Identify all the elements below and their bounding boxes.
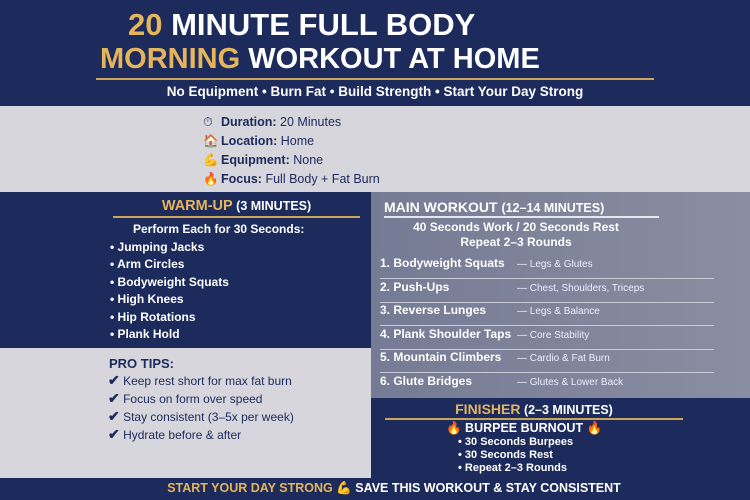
warm-up list	[110, 222, 304, 341]
exercise list	[380, 256, 714, 388]
main workout intro: 40 Seconds Work / 20 Seconds Rest	[413, 220, 619, 234]
info list: Focus: Full Body + Fat Burn	[221, 172, 380, 186]
tips list	[108, 372, 294, 442]
warm-up heading	[113, 198, 360, 218]
exercise list: 4. Plank Shoulder Taps	[380, 327, 511, 341]
info list: Equipment: None	[221, 153, 323, 167]
header	[0, 0, 750, 106]
info list: ⏱	[203, 115, 213, 129]
info list: 🏠	[203, 134, 219, 148]
exercise list: — Legs & Glutes	[517, 259, 593, 270]
warm-up list: • Hip Rotations	[110, 310, 196, 324]
footer	[0, 478, 750, 500]
info list: 🔥	[203, 172, 219, 186]
warm-up list: • Plank Hold	[110, 327, 180, 341]
warm-up list: • Jumping Jacks	[110, 240, 204, 254]
warm-up list: Perform Each for 30 Seconds:	[133, 222, 304, 236]
panel: finisher	[371, 398, 750, 478]
exercise list: 2. Push-Ups	[380, 280, 449, 294]
info list: 💪	[203, 153, 219, 167]
footer: START YOUR DAY STRONG 💪 SAVE THIS WORKOUT & STAY CONSISTENT	[167, 481, 621, 495]
title: MORNING WORKOUT AT HOME	[100, 43, 540, 75]
title: 20 MINUTE FULL BODY	[128, 7, 475, 42]
finisher heading: FINISHER (2–3 MINUTES)	[455, 401, 613, 417]
main workout intro	[413, 220, 619, 249]
exercise list: 1. Bodyweight Squats	[380, 256, 505, 270]
finisher heading	[385, 401, 683, 420]
exercise list: — Cardio & Fat Burn	[517, 353, 610, 364]
exercise list: — Legs & Balance	[517, 306, 600, 317]
panel: main workout	[371, 192, 750, 398]
finisher list: • 30 Seconds Rest	[458, 449, 553, 461]
pro tips heading: PRO TIPS:	[109, 356, 174, 371]
warm-up list: • Bodyweight Squats	[110, 274, 229, 288]
panel: pro tips	[0, 348, 371, 478]
main workout heading: MAIN WORKOUT (12–14 MINUTES)	[384, 199, 604, 215]
title	[100, 7, 540, 75]
exercise list: — Glutes & Lower Back	[517, 377, 623, 388]
subtitle: No Equipment • Burn Fat • Build Strength • Start Your Day Strong	[167, 84, 583, 99]
info list: Location: Home	[221, 134, 314, 148]
exercise list: 3. Reverse Lunges	[380, 303, 486, 317]
tips list: ✔ Hydrate before & after	[108, 426, 241, 442]
info list: Duration: 20 Minutes	[221, 115, 341, 129]
tips list: ✔ Focus on form over speed	[108, 390, 262, 406]
tips list: ✔ Keep rest short for max fat burn	[108, 372, 292, 388]
panel: warm-up	[0, 192, 371, 348]
exercise list: 6. Glute Bridges	[380, 374, 472, 388]
exercise list: — Core Stability	[517, 330, 589, 341]
exercise list: 5. Mountain Climbers	[380, 350, 501, 364]
warm-up list: • Arm Circles	[110, 257, 184, 271]
finisher list: • Repeat 2–3 Rounds	[458, 462, 567, 474]
tips list: ✔ Stay consistent (3–5x per week)	[108, 408, 294, 424]
warm-up list: • High Knees	[110, 292, 184, 306]
exercise list: — Chest, Shoulders, Triceps	[517, 283, 644, 294]
main workout heading	[384, 199, 659, 218]
main workout intro: Repeat 2–3 Rounds	[460, 235, 572, 249]
warm-up heading: WARM-UP (3 MINUTES)	[162, 198, 311, 214]
info list	[203, 115, 380, 186]
burpee burnout: 🔥 BURPEE BURNOUT 🔥	[446, 421, 602, 435]
info band	[0, 106, 750, 192]
finisher list: • 30 Seconds Burpees	[458, 436, 573, 448]
finisher list	[458, 436, 573, 474]
